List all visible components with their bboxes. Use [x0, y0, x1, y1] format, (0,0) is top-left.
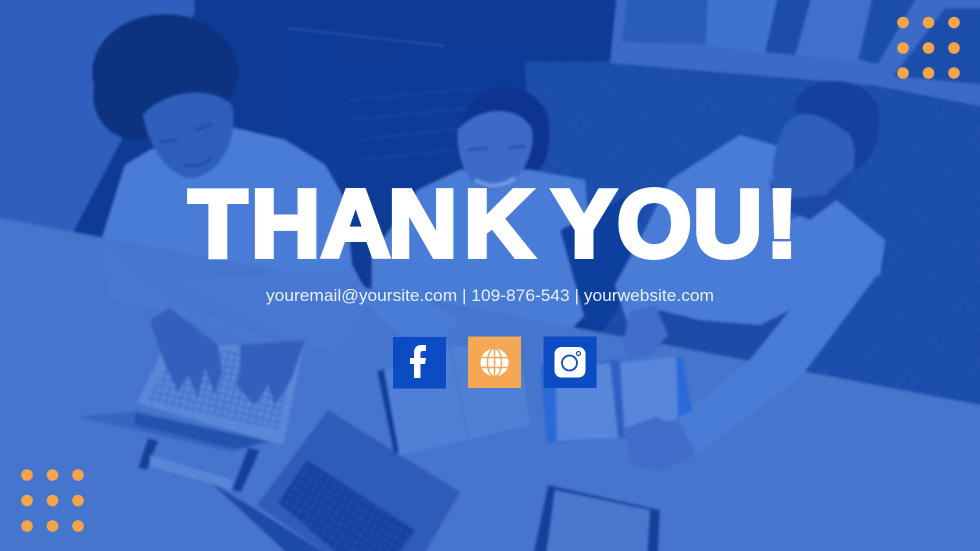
title: THANK YOU! [188, 170, 798, 278]
blue notebook [540, 357, 692, 443]
notebook centre [377, 345, 530, 456]
chairs [285, 28, 526, 195]
tablet [533, 485, 660, 551]
dark gap between centre woman and man [560, 190, 640, 335]
person: man right [600, 81, 885, 360]
shirt [615, 135, 885, 330]
sleeves [100, 235, 885, 455]
hair [92, 14, 238, 140]
decorative dots: bottom left [21, 469, 84, 532]
dark back area [73, 0, 630, 345]
carpet [524, 62, 980, 410]
man's hands [623, 305, 695, 470]
open laptop [210, 410, 460, 551]
face [143, 93, 233, 178]
hands on keyboard [150, 308, 305, 405]
icon: globe [468, 336, 521, 388]
icon: facebook [393, 337, 446, 388]
trousers [600, 270, 820, 360]
person: woman centre [372, 86, 600, 330]
shelf unit [610, 0, 980, 107]
person: woman left [92, 14, 370, 350]
decorative dots: top right [897, 17, 960, 79]
icon: instagram [544, 336, 597, 388]
shirt [100, 128, 370, 350]
table [0, 217, 980, 551]
laptop: keyboard and screen [77, 345, 304, 492]
face [772, 114, 855, 220]
hair [795, 81, 880, 170]
contact details: youremail@yoursite.com | 109-876-543 | yourwebsite.com [266, 287, 714, 305]
